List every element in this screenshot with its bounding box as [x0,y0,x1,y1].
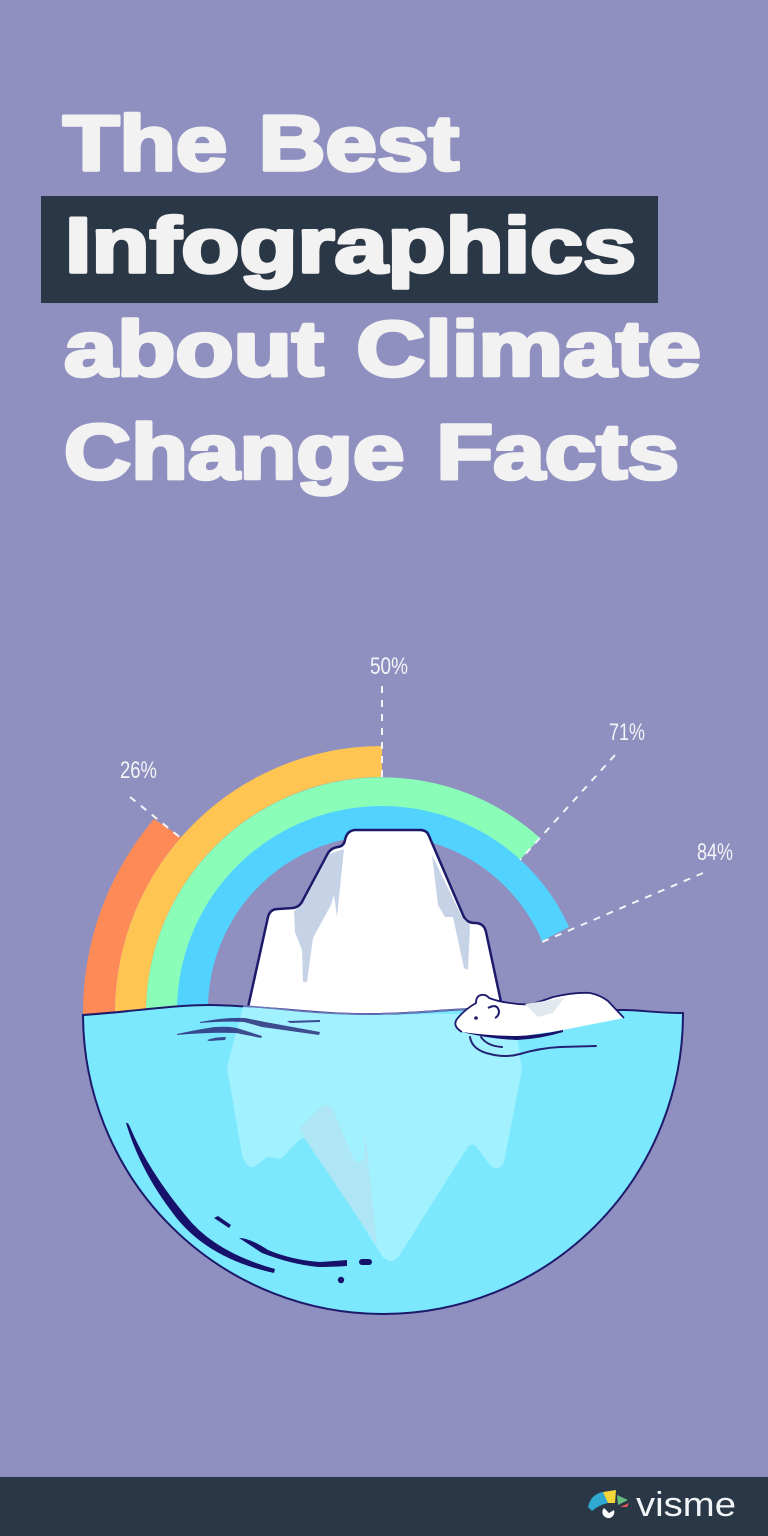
arc: 50% yellow [115,746,382,1020]
leader: 26% [130,797,182,839]
submerged iceberg [227,1006,522,1261]
leader: 84% [542,873,703,942]
visme logo mark [588,1490,629,1518]
bear ear [488,1006,499,1018]
footer bar [0,1477,768,1536]
bear outline [455,993,624,1032]
label: 26%: 26% [120,757,157,784]
arc: 84% blue [177,806,569,1020]
label: 71%: 71% [609,719,645,746]
title line: about Climate: about Climate [64,304,701,392]
label: 84%: 84% [697,839,733,866]
submerged ice shadow [299,1105,384,1256]
leader: 71% [520,755,615,860]
water highlights [126,1123,372,1283]
arc: 26% orange [83,819,181,1020]
iceberg body [243,830,507,1030]
title [41,99,701,496]
leader: 50% [381,686,383,778]
submerged ice mass [227,1007,522,1261]
bear back shade [525,998,564,1017]
title line: Change Facts: Change Facts [64,408,679,496]
title highlight: Infographics: Infographics [65,201,636,289]
visme wordmark: visme [636,1486,736,1524]
label: 50%: 50% [370,653,408,680]
iceberg shadow left [294,849,344,982]
title highlight: Infographics [41,196,658,303]
arc: 71% green [146,777,540,1020]
bear eye [474,1016,478,1020]
rainbow radial chart [83,746,569,1020]
percent labels [120,653,733,866]
polar bear [455,993,624,1040]
water bowl [83,1005,683,1314]
dashed leader lines [130,686,703,942]
waterline across iceberg [243,1006,472,1014]
bear body [455,993,624,1037]
water ripples near iceberg [177,1018,320,1041]
iceberg above water [243,830,507,1030]
ripples around bear [470,1037,596,1056]
bear belly line [462,1030,563,1040]
title line: The Best: The Best [63,99,459,187]
iceberg shadow right [432,855,470,970]
